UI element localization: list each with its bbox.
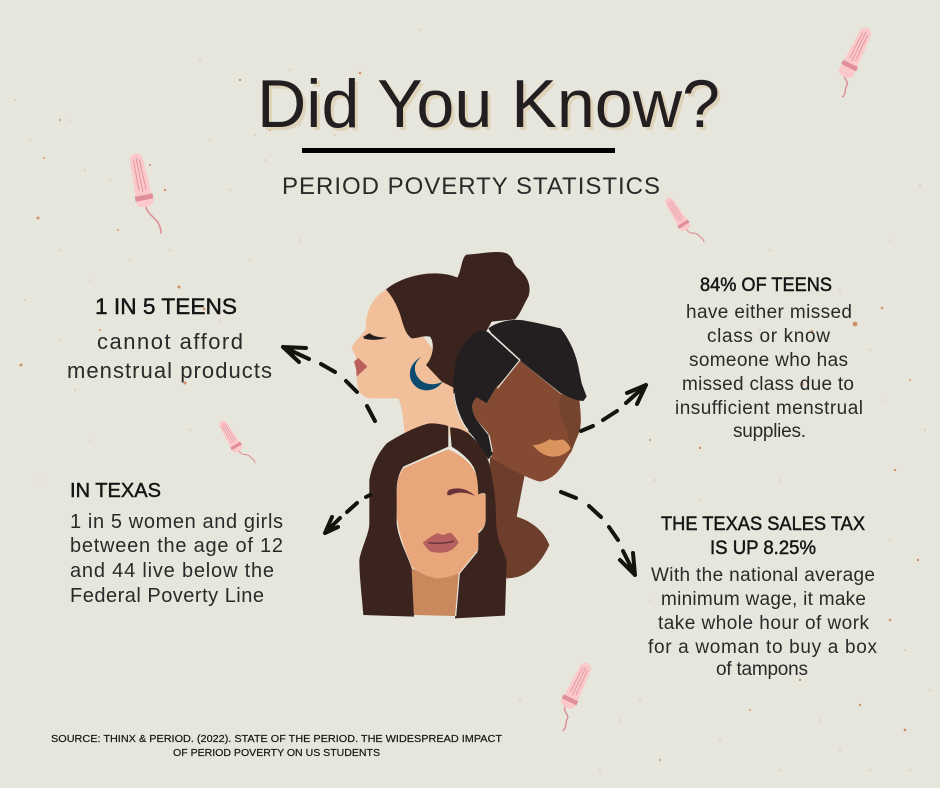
- text block: 84% of teens: 84% OF TEENS: [700, 275, 832, 296]
- text block: Texas sales tax: [648, 514, 878, 680]
- woman three face: [396, 449, 486, 578]
- text block: 1 in 5 teens: menstrual products: [67, 358, 272, 383]
- text block: Texas sales tax: for a woman to buy a box: [648, 637, 878, 658]
- text block: in Texas: [70, 480, 283, 607]
- text block: in Texas: between the age of 12: [70, 535, 283, 557]
- woman two cheek shadow: [559, 395, 581, 453]
- woman three lips: [423, 533, 459, 553]
- arrow: to sales tax stat: [561, 492, 635, 575]
- text block: 84% of teens: have either missed: [686, 302, 852, 323]
- illustration: three women: [352, 252, 587, 618]
- text block: in Texas: and 44 live below the: [70, 560, 274, 582]
- woman two face: [472, 361, 581, 482]
- woman one earring: [410, 357, 443, 390]
- woman two hair: [488, 320, 587, 401]
- icon: tampon center top: [662, 194, 705, 250]
- source note: [51, 734, 502, 759]
- text block: 84% of teens: class or know: [707, 326, 830, 347]
- text block: in Texas: IN TEXAS: [70, 480, 161, 502]
- text block: 1 in 5 teens: cannot afford: [97, 329, 243, 354]
- text block: Texas sales tax: With the national average: [651, 565, 875, 586]
- title: Did You Know?: [257, 66, 720, 142]
- arrow: to teens afford stat: [283, 347, 375, 421]
- arrow: to teens missed class stat: [581, 385, 646, 431]
- text block: 84% of teens: supplies.: [733, 421, 806, 442]
- icon: tampon bottom: [549, 660, 595, 731]
- source note: SOURCE: THINX & PERIOD. (2022). STATE OF THE PERIOD. THE WIDESPREAD IMPACT: [51, 734, 502, 745]
- text block: in Texas: 1 in 5 women and girls: [70, 511, 283, 533]
- text block: 1 in 5 teens: 1 IN 5 TEENS: [95, 294, 237, 319]
- title underline: [302, 148, 615, 153]
- subtitle: PERIOD POVERTY STATISTICS: [282, 173, 660, 200]
- text block: Texas sales tax: take whole hour of work: [658, 613, 870, 634]
- woman one skin: [352, 289, 470, 435]
- woman three eyebrow: [447, 488, 475, 496]
- woman two side hair: [453, 331, 519, 459]
- arrow: to Texas stat: [325, 495, 370, 533]
- text block: 84% of teens: missed class due to: [682, 374, 854, 395]
- icon: tampon middle left: [216, 417, 256, 470]
- text block: in Texas: Federal Poverty Line: [70, 585, 264, 607]
- icon: tampon upper left: [126, 152, 161, 237]
- woman one lips: [354, 358, 367, 377]
- woman three left hair: [359, 423, 448, 617]
- text block: Texas sales tax: IS UP 8.25%: [710, 538, 816, 559]
- woman one hair: [386, 252, 530, 388]
- text block: 84% of teens: someone who has: [689, 350, 848, 371]
- text block: 84% of teens: insufficient menstrual: [675, 398, 863, 419]
- source note: OF PERIOD POVERTY ON US STUDENTS: [173, 748, 380, 759]
- text block: Texas sales tax: minimum wage, it make: [661, 589, 866, 610]
- title: Did You Know?: [260, 69, 723, 145]
- woman two neck and shoulder: [487, 457, 549, 578]
- text block: 1 in 5 teens: [67, 294, 272, 383]
- icon: tampon top right: [828, 25, 875, 98]
- woman three right hair: [450, 427, 507, 618]
- text block: Texas sales tax: THE TEXAS SALES TAX: [661, 514, 865, 535]
- text block: Texas sales tax: of tampons: [716, 659, 808, 680]
- text block: 84% of teens: [675, 275, 863, 442]
- woman three neck: [412, 568, 459, 616]
- woman one eye: [363, 333, 387, 340]
- woman two lips: [533, 439, 571, 457]
